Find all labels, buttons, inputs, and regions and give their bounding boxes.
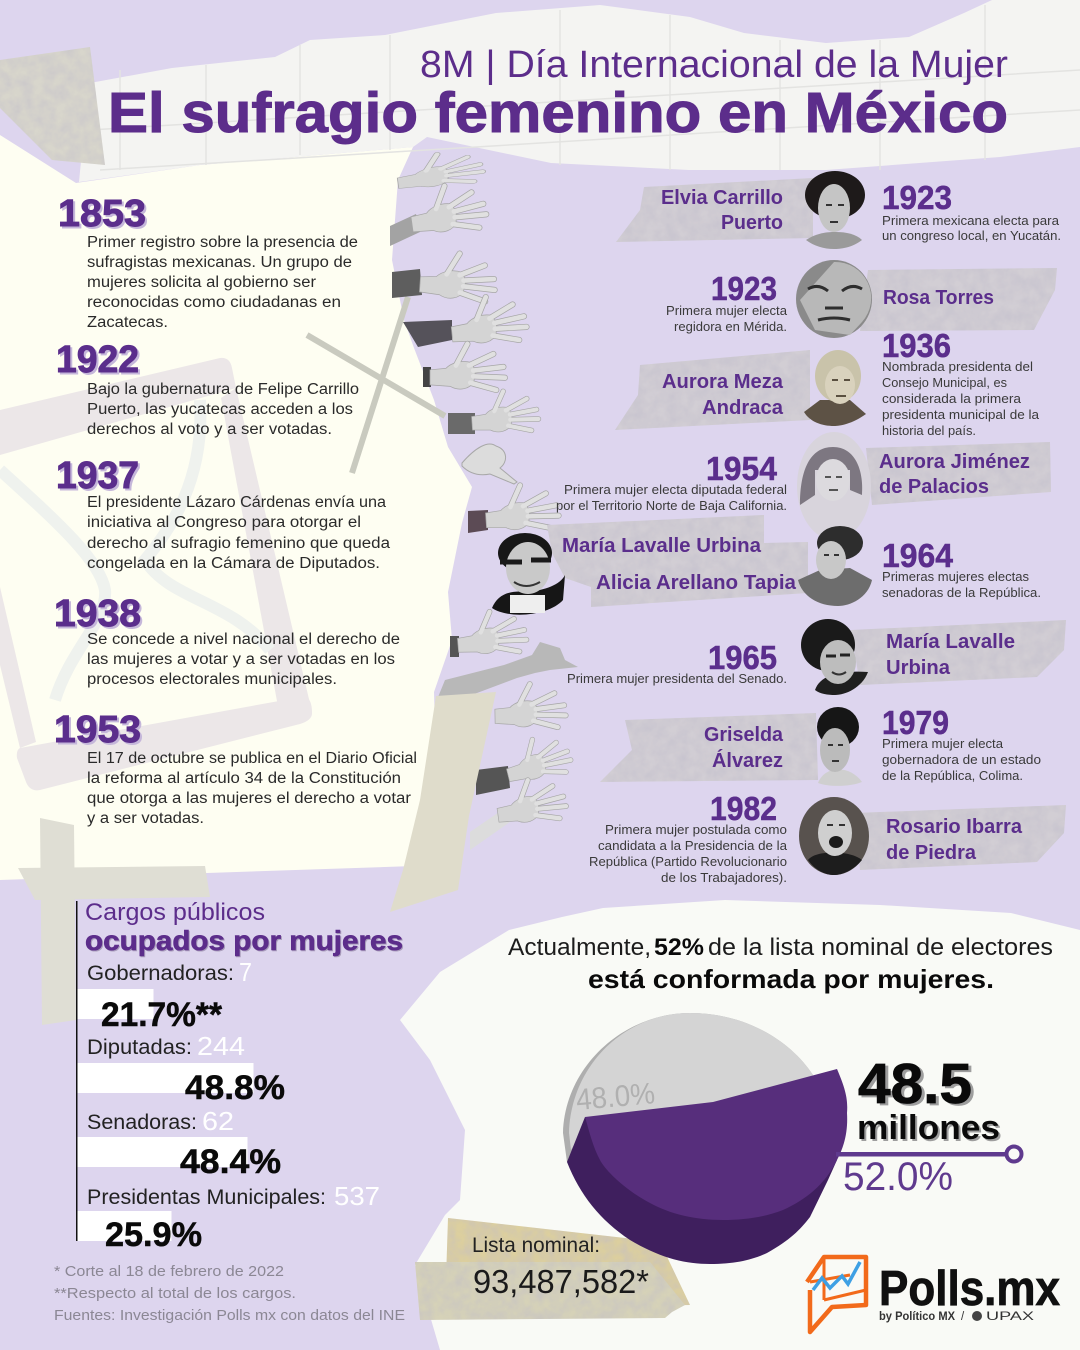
row: Diputadas: 244: [197, 1031, 245, 1061]
event 1953: 1953: [54, 709, 141, 751]
torn paper: grid title strip: [79, 0, 1080, 182]
torn paper: cream timeline panel: [0, 135, 472, 880]
entry: Rosario Ibarra de Piedra: Primera mujer postulada como: [605, 822, 787, 837]
entry: 1936 Aurora Meza Andraca: Consejo Municipal, es: [882, 375, 1007, 390]
entry: Rosa Torres: regidora en Mérida.: [674, 319, 787, 334]
event 1853: Zacatecas.: [87, 314, 168, 331]
event 1853: Primer registro sobre la presencia de: [87, 234, 358, 251]
panel heading: [85, 899, 403, 956]
event 1853: mujeres solicita al gobierno ser: [87, 274, 316, 291]
panel heading: Cargos públicos: [85, 899, 265, 926]
row: Senadoras: Senadoras:: [87, 1111, 197, 1134]
icon: hand 11: [494, 683, 566, 728]
entry: Rosario Ibarra de Piedra: de Piedra: [886, 842, 977, 864]
event 1937: iniciativa al Congreso para otorgar el: [87, 514, 361, 531]
entry: Rosario Ibarra de Piedra: República (Partido Revolucionario: [589, 854, 787, 869]
statement: 52% of electors: 52%: [654, 934, 704, 961]
icon: hand 12 with dark sleeve: [476, 732, 573, 795]
entry: María Lavalle Urbina and Alicia Arellano Tapia: 1964: [882, 537, 954, 574]
icon: hand 8 with dark cuff: [468, 483, 560, 533]
row: Diputadas: Diputadas:: [87, 1036, 192, 1059]
row: Senadoras: 48.4%: [180, 1143, 281, 1181]
event 1853: [58, 193, 358, 331]
row: Gobernadoras: [78, 957, 252, 1034]
entry: 1936 Aurora Meza Andraca: presidenta municipal de la: [882, 407, 1040, 422]
entry: 1936 Aurora Meza Andraca: Nombrada presidenta del: [882, 359, 1033, 374]
row: Gobernadoras: 7: [239, 957, 252, 987]
entry: Rosa Torres: 1923: [711, 270, 777, 307]
icon: hand 5: [423, 344, 505, 390]
faded hourglass illustration: [0, 358, 312, 790]
event 1953: la reforma al artículo 34 de la Constitución: [87, 770, 401, 787]
tape: lista nominal: [415, 1218, 690, 1320]
logo: Polls.mx: by Político MX: [879, 1311, 955, 1323]
entry: Rosa Torres: [666, 260, 1057, 338]
event 1953: y a ser votadas.: [87, 810, 204, 827]
entry: Griselda Álvarez: Álvarez: [712, 749, 783, 772]
row: Senadoras: [78, 1106, 281, 1181]
beige tape on cream panel: [390, 692, 496, 912]
entry: Elvia Carrillo Puerto: Puerto: [721, 212, 783, 234]
icon: hand 1: [395, 148, 484, 192]
entry: Elvia Carrillo Puerto: un congreso local, en Yucatán.: [882, 228, 1061, 243]
title block: [108, 44, 1008, 145]
statement: 52% of electors: Actualmente,: [508, 934, 651, 961]
row: Diputadas: 48.8%: [185, 1069, 285, 1107]
entry: María Lavalle Urbina 1965: [567, 619, 1066, 695]
entry: Griselda Álvarez: Griselda: [704, 724, 784, 746]
row: Presidentas Municipales: 537: [334, 1181, 380, 1211]
timeline: women entries: [492, 171, 1066, 885]
footnotes and sources: **Respecto al total de los cargos.: [54, 1285, 296, 1302]
lista nominal total: Lista nominal:: [472, 1234, 600, 1257]
entry: Rosario Ibarra de Piedra: candidata a la Presidencia de la: [598, 838, 788, 853]
icon: hand 3: [392, 251, 497, 302]
entry: Rosario Ibarra de Piedra: Rosario Ibarra: [886, 816, 1023, 838]
icon: orange chat box with chart line: [807, 1257, 866, 1332]
event 1853: reconocidas como ciudadanas en: [87, 294, 341, 311]
event 1938: 1938: [54, 593, 141, 635]
entry: Aurora Jiménez de Palacios: Primera mujer electa diputada federal: [564, 482, 787, 497]
event 1922: derechos al voto y a ser votadas.: [87, 421, 332, 438]
event 1937: 1937: [56, 455, 139, 497]
entry: 1936 Aurora Meza Andraca: considerada la primera: [882, 391, 1022, 406]
entry: Elvia Carrillo Puerto: Elvia Carrillo: [661, 187, 783, 209]
axis line: [76, 901, 78, 1241]
decorative tape cross bottom left: [18, 818, 210, 1025]
statement: 52% of electors: está conformada por mujeres.: [588, 964, 994, 994]
entry: Griselda Álvarez: Primera mujer electa: [882, 736, 1004, 751]
icon: hand 9: [450, 609, 527, 657]
entry: María Lavalle Urbina and Alicia Arellano Tapia: senadoras de la República.: [882, 585, 1041, 600]
statement: 52% of electors: de la lista nominal de electores: [708, 934, 1053, 961]
entry: 1936 Aurora Meza Andraca: historia del país.: [882, 423, 976, 438]
callout: 48.5 millones 52.0%: [836, 1052, 1022, 1199]
row: Presidentas Municipales: [78, 1181, 380, 1254]
event 1922: [56, 339, 359, 438]
callout: 48.5 millones 52.0%: 48.5: [858, 1052, 972, 1116]
event 1937: [56, 455, 390, 572]
timeline: left column: [54, 193, 417, 827]
entry: Rosario Ibarra de Piedra: 1982: [710, 790, 777, 827]
icon: hand 4 with checked sleeve: [403, 293, 528, 347]
entry: 1936 Aurora Meza Andraca: 1936: [882, 327, 951, 364]
entry: Elvia Carrillo Puerto: 1923: [882, 179, 952, 216]
entry: Aurora Jiménez de Palacios: Aurora Jiménez: [879, 451, 1030, 473]
event 1937: derecho al sufragio femenino que queda: [87, 535, 390, 552]
event 1938: las mujeres a votar y a ser votadas en los: [87, 651, 395, 668]
entry: Rosario Ibarra de Piedra: de los Trabajadores).: [661, 870, 787, 885]
entry: María Lavalle Urbina 1965: Primera mujer presidenta del Senado.: [567, 671, 787, 686]
event 1953: que otorga a las mujeres el derecho a votar: [87, 790, 411, 807]
entry: 1936 Aurora Meza Andraca: [615, 327, 1040, 438]
scribbled X mark: [307, 297, 445, 473]
entry: Rosa Torres: Primera mujer electa: [666, 303, 788, 318]
icon: hand 7 thumbs down: [462, 444, 517, 484]
icon: hand 13: [470, 775, 568, 850]
callout: 48.5 millones 52.0%: 52.0%: [843, 1155, 953, 1199]
title: subtitle line: 8M | Día Internacional de la Mujer: [420, 44, 1008, 86]
lista nominal total: 93,487,582*: [473, 1263, 649, 1300]
row: Gobernadoras: Gobernadoras:: [87, 962, 234, 985]
decorative tape top left: [0, 47, 105, 165]
title: main heading: El sufragio femenino en México: [108, 81, 1008, 145]
entry: 1936 Aurora Meza Andraca: Aurora Meza: [662, 371, 784, 393]
event 1938: Se concede a nivel nacional el derecho de: [87, 631, 400, 648]
event 1953: [54, 709, 417, 827]
entry: Griselda Álvarez: [600, 704, 1041, 786]
footnotes and sources: Fuentes: Investigación Polls mx con datos del INE: [54, 1307, 405, 1324]
event 1922: Bajo la gubernatura de Felipe Carrillo: [87, 381, 359, 398]
entry: María Lavalle Urbina and Alicia Arellano Tapia: María Lavalle Urbina: [562, 535, 762, 557]
entry: María Lavalle Urbina and Alicia Arellano Tapia: Alicia Arellano Tapia: [596, 572, 797, 594]
entry: Elvia Carrillo Puerto: [616, 171, 1061, 249]
logo: Polls.mx: Polls.mx: [879, 1262, 1060, 1316]
entry: Aurora Jiménez de Palacios: de Palacios: [879, 476, 989, 498]
icon: hand 2: [390, 181, 488, 246]
footnotes and sources: [54, 1263, 405, 1324]
entry: Rosa Torres: Rosa Torres: [883, 287, 994, 309]
row: Presidentas Municipales: Presidentas Municipales:: [87, 1186, 326, 1209]
torn paper: bottom white panel: [400, 900, 1080, 1350]
event 1922: Puerto, las yucatecas acceden a los: [87, 401, 353, 418]
panel: public offices held by women: [76, 899, 403, 1254]
panel heading: ocupados por mujeres: [85, 925, 403, 956]
row: Gobernadoras: 21.7%**: [101, 996, 223, 1034]
row: Diputadas: [78, 1031, 285, 1107]
logo: Polls.mx: [807, 1257, 1060, 1332]
row: Presidentas Municipales: 25.9%: [105, 1216, 202, 1254]
pie label: 48.0%: 48.0%: [575, 1077, 656, 1117]
pie chart: lista nominal by gender: [563, 1013, 847, 1264]
footnotes and sources: * Corte al 18 de febrero de 2022: [54, 1263, 284, 1280]
event 1938: procesos electorales municipales.: [87, 671, 337, 688]
event 1937: congelada en la Cámara de Diputados.: [87, 555, 380, 572]
event 1853: sufragistas mexicanas. Un grupo de: [87, 254, 352, 271]
event 1922: 1922: [56, 339, 139, 381]
entry: Rosario Ibarra de Piedra: [589, 790, 1066, 885]
hands column: [390, 148, 578, 850]
icon: hand 6 with bracelets: [448, 389, 539, 434]
entry: María Lavalle Urbina and Alicia Arellano Tapia: [492, 515, 1041, 615]
row: Senadoras: 62: [202, 1106, 234, 1136]
logo: Polls.mx: UPAX: [986, 1311, 1035, 1323]
entry: 1936 Aurora Meza Andraca: Andraca: [702, 397, 784, 419]
logo: Polls.mx: /: [961, 1311, 965, 1323]
entry: Elvia Carrillo Puerto: Primera mexicana electa para: [882, 213, 1060, 228]
event 1953: El 17 de octubre se publica en el Diario Oficial: [87, 750, 417, 767]
entry: Aurora Jiménez de Palacios: por el Territorio Norte de Baja California.: [556, 498, 787, 513]
entry: Griselda Álvarez: gobernadora de un estado: [882, 752, 1041, 767]
entry: María Lavalle Urbina and Alicia Arellano Tapia: Primeras mujeres electas: [882, 569, 1030, 584]
entry: María Lavalle Urbina 1965: María Lavalle: [886, 631, 1015, 653]
statement: 52% of electors: [508, 934, 1053, 994]
entry: María Lavalle Urbina 1965: 1965: [708, 639, 777, 676]
icon: hand 10 long arm with fist: [436, 642, 578, 705]
entry: Aurora Jiménez de Palacios: [556, 432, 1051, 540]
event 1938: [54, 593, 400, 688]
entry: Griselda Álvarez: 1979: [882, 704, 949, 741]
entry: Griselda Álvarez: de la República, Colima.: [882, 768, 1023, 783]
event 1937: El presidente Lázaro Cárdenas envía una: [87, 494, 386, 511]
entry: Aurora Jiménez de Palacios: 1954: [706, 450, 778, 487]
entry: María Lavalle Urbina 1965: Urbina: [886, 657, 951, 679]
callout: 48.5 millones 52.0%: millones: [857, 1109, 1000, 1147]
event 1853: 1853: [58, 193, 146, 235]
lista nominal total: [472, 1234, 649, 1300]
